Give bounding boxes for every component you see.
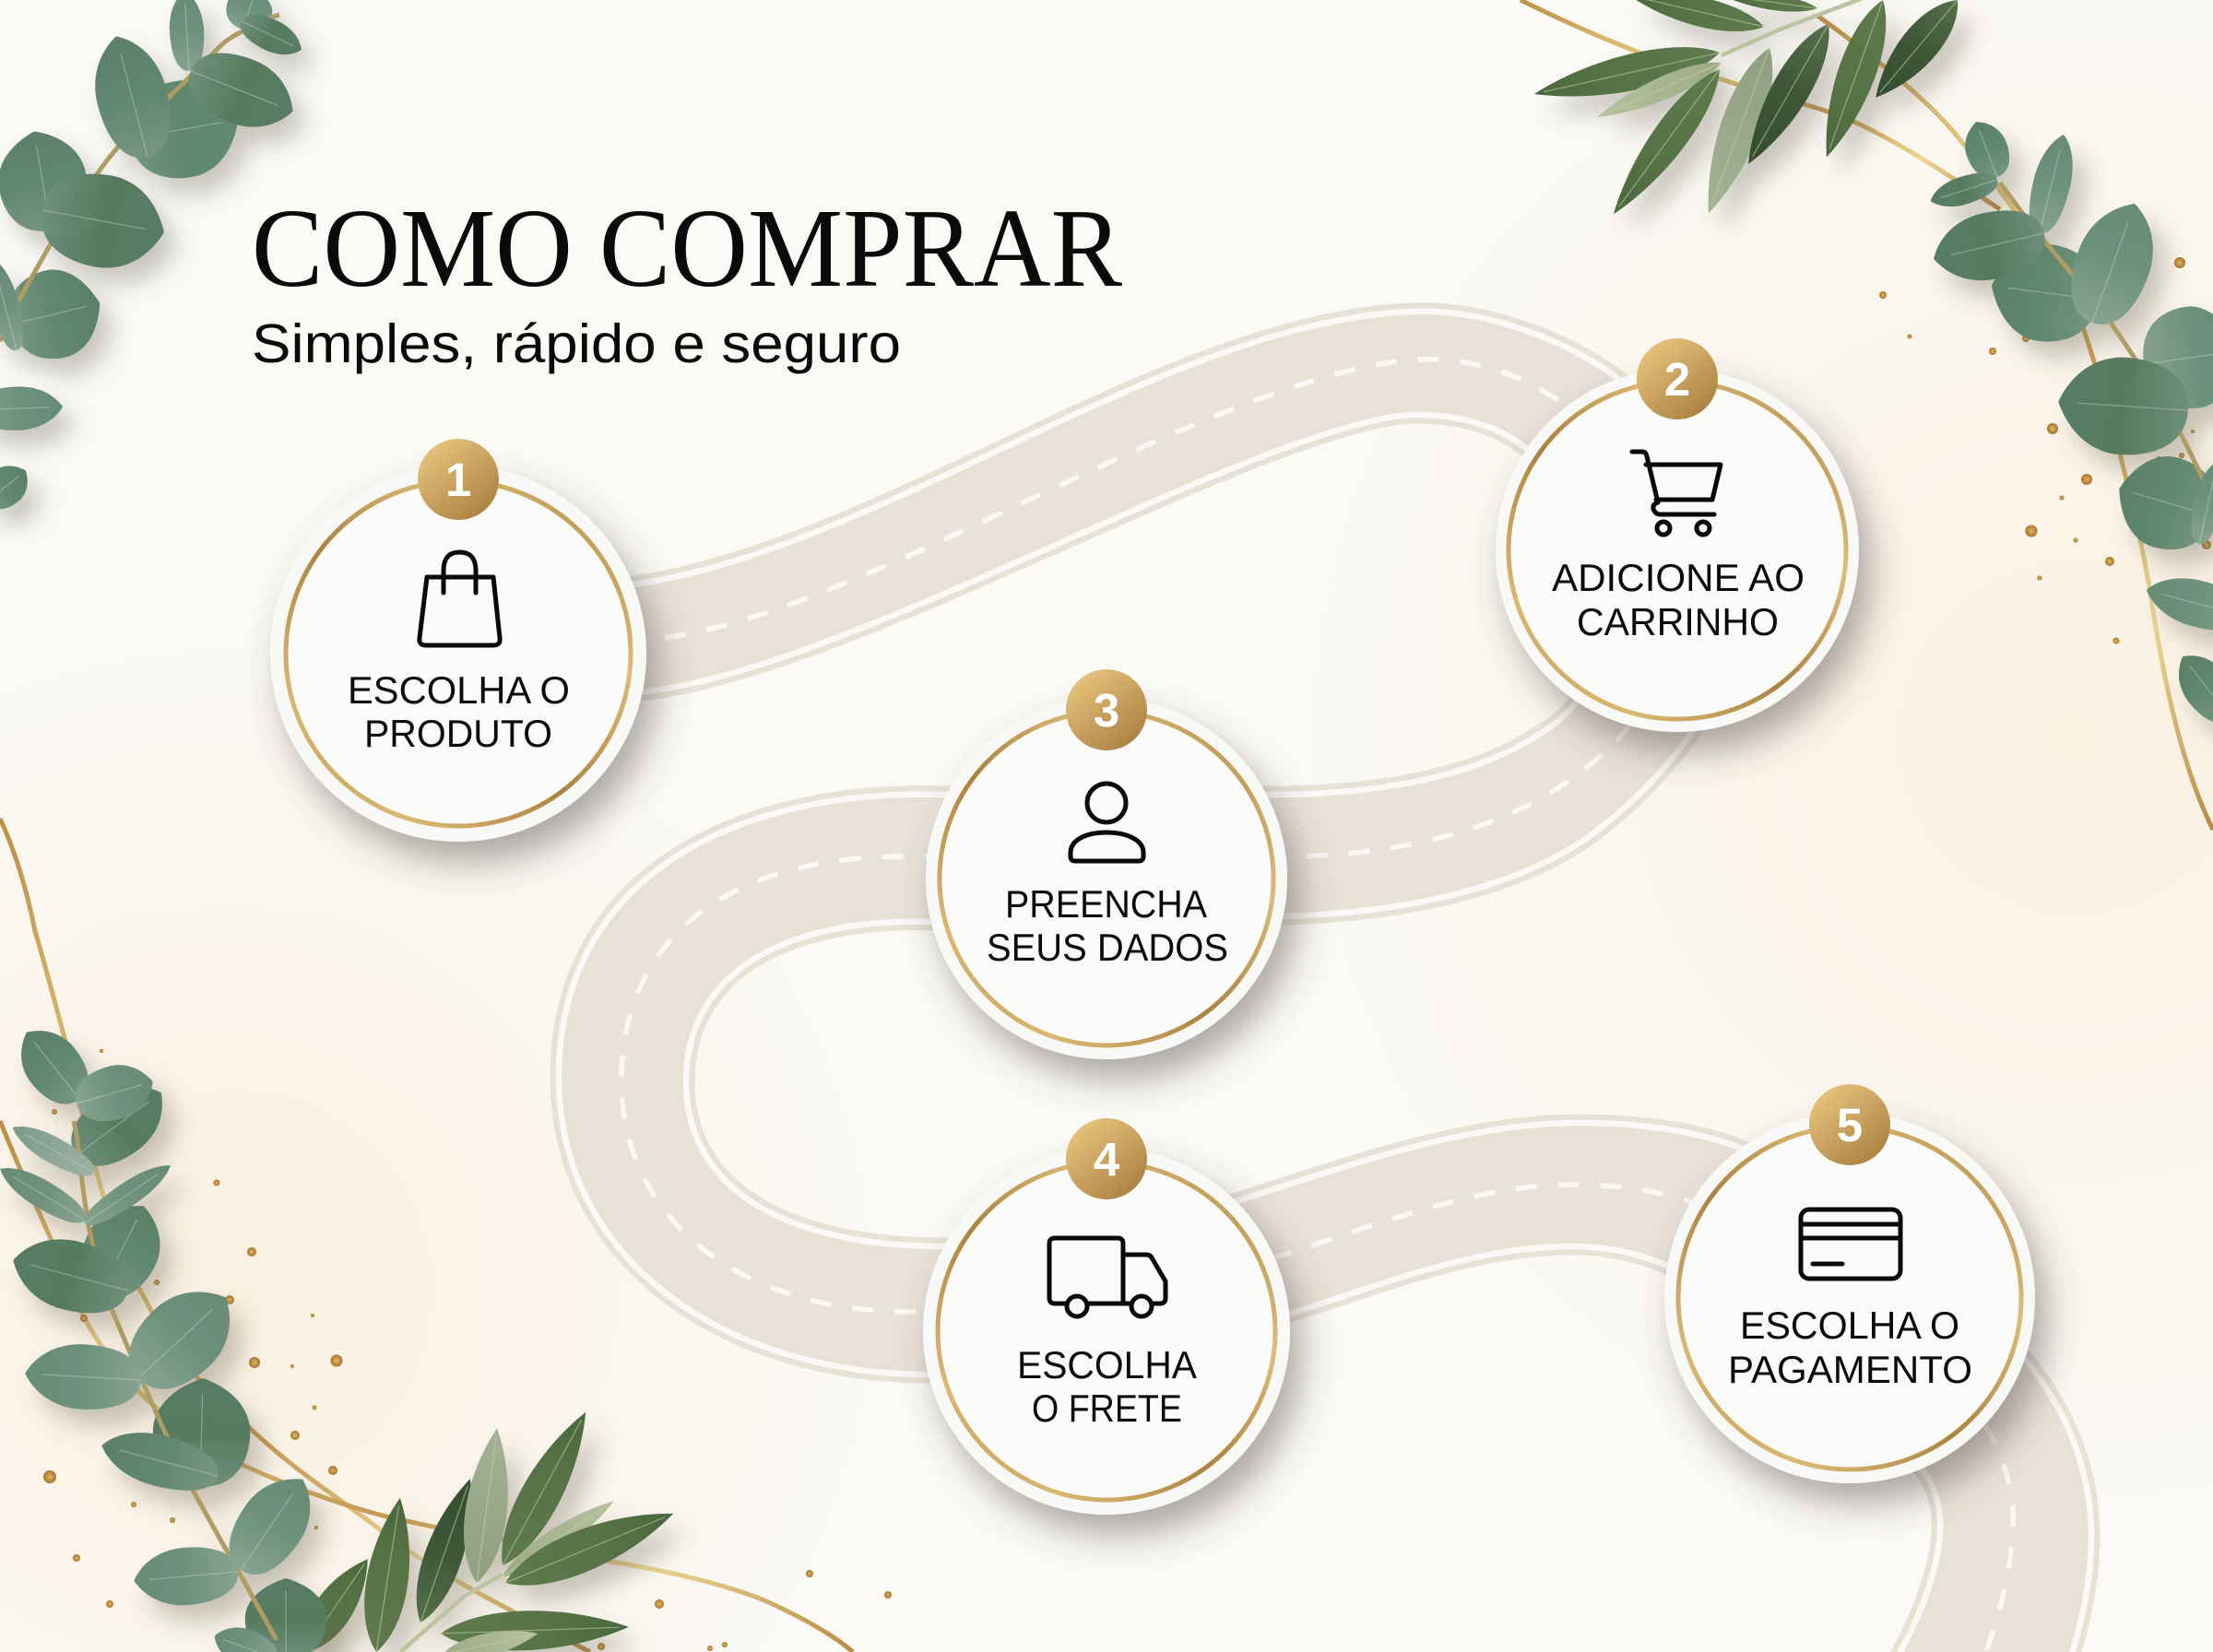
step 1: escolha o produto: [270, 439, 646, 842]
badge: number 4: [1066, 1118, 1147, 1199]
icon: delivery truck: [1049, 1238, 1166, 1316]
step 4: escolha o frete: [923, 1118, 1290, 1515]
badge: number 1: 1: [445, 454, 471, 506]
icon: credit card: [1801, 1210, 1900, 1279]
winding road: [498, 312, 2091, 1652]
icon: shopping bag: [420, 552, 500, 645]
eucalyptus branch: right: [1926, 114, 2213, 733]
icon: shopping cart: [1632, 452, 1721, 535]
step 2: adicione ao carrinho: [1496, 338, 1859, 732]
label: preencha seus dados: SEUS DADOS: [987, 926, 1228, 969]
step 3: preencha seus dados: [926, 669, 1287, 1059]
badge: number 2: 2: [1664, 353, 1690, 406]
icon: person: [1071, 784, 1143, 861]
badge: number 3: [1066, 669, 1147, 750]
label: escolha o frete: O FRETE: [1032, 1386, 1182, 1430]
eucalyptus branch: top left: [0, 0, 308, 517]
badge: number 5: 5: [1837, 1099, 1863, 1151]
step 5: escolha o pagamento: [1664, 1084, 2035, 1483]
label: escolha o frete: ESCOLHA: [1017, 1343, 1197, 1386]
badge: number 1: [418, 439, 499, 520]
label: adicione ao carrinho: ADICIONE AO: [1552, 556, 1805, 599]
label: adicione ao carrinho: CARRINHO: [1577, 600, 1779, 643]
label: escolha o produto: ESCOLHA O: [348, 668, 570, 712]
badge: number 4: 4: [1094, 1133, 1120, 1186]
label: escolha o pagamento: [1728, 1304, 1972, 1391]
badge: number 2: [1637, 338, 1718, 419]
label: escolha o pagamento: ESCOLHA O: [1740, 1304, 1959, 1347]
olive branch: top right: [1531, 0, 1972, 224]
eucalyptus branch: bottom left: [0, 1015, 329, 1652]
label: preencha seus dados: PREENCHA: [1005, 882, 1207, 926]
badge: number 5: [1809, 1084, 1890, 1165]
label: escolha o frete: [1017, 1343, 1197, 1430]
label: escolha o produto: PRODUTO: [364, 712, 552, 755]
label: preencha seus dados: [987, 882, 1228, 969]
title: COMO COMPRAR: [252, 186, 1123, 311]
subtitle: Simples, rápido e seguro: [252, 313, 901, 374]
badge: number 3: 3: [1094, 684, 1119, 737]
label: adicione ao carrinho: [1552, 556, 1805, 643]
label: escolha o pagamento: PAGAMENTO: [1728, 1348, 1972, 1391]
label: escolha o produto: [348, 668, 570, 755]
olive branch: bottom: [289, 1403, 681, 1652]
